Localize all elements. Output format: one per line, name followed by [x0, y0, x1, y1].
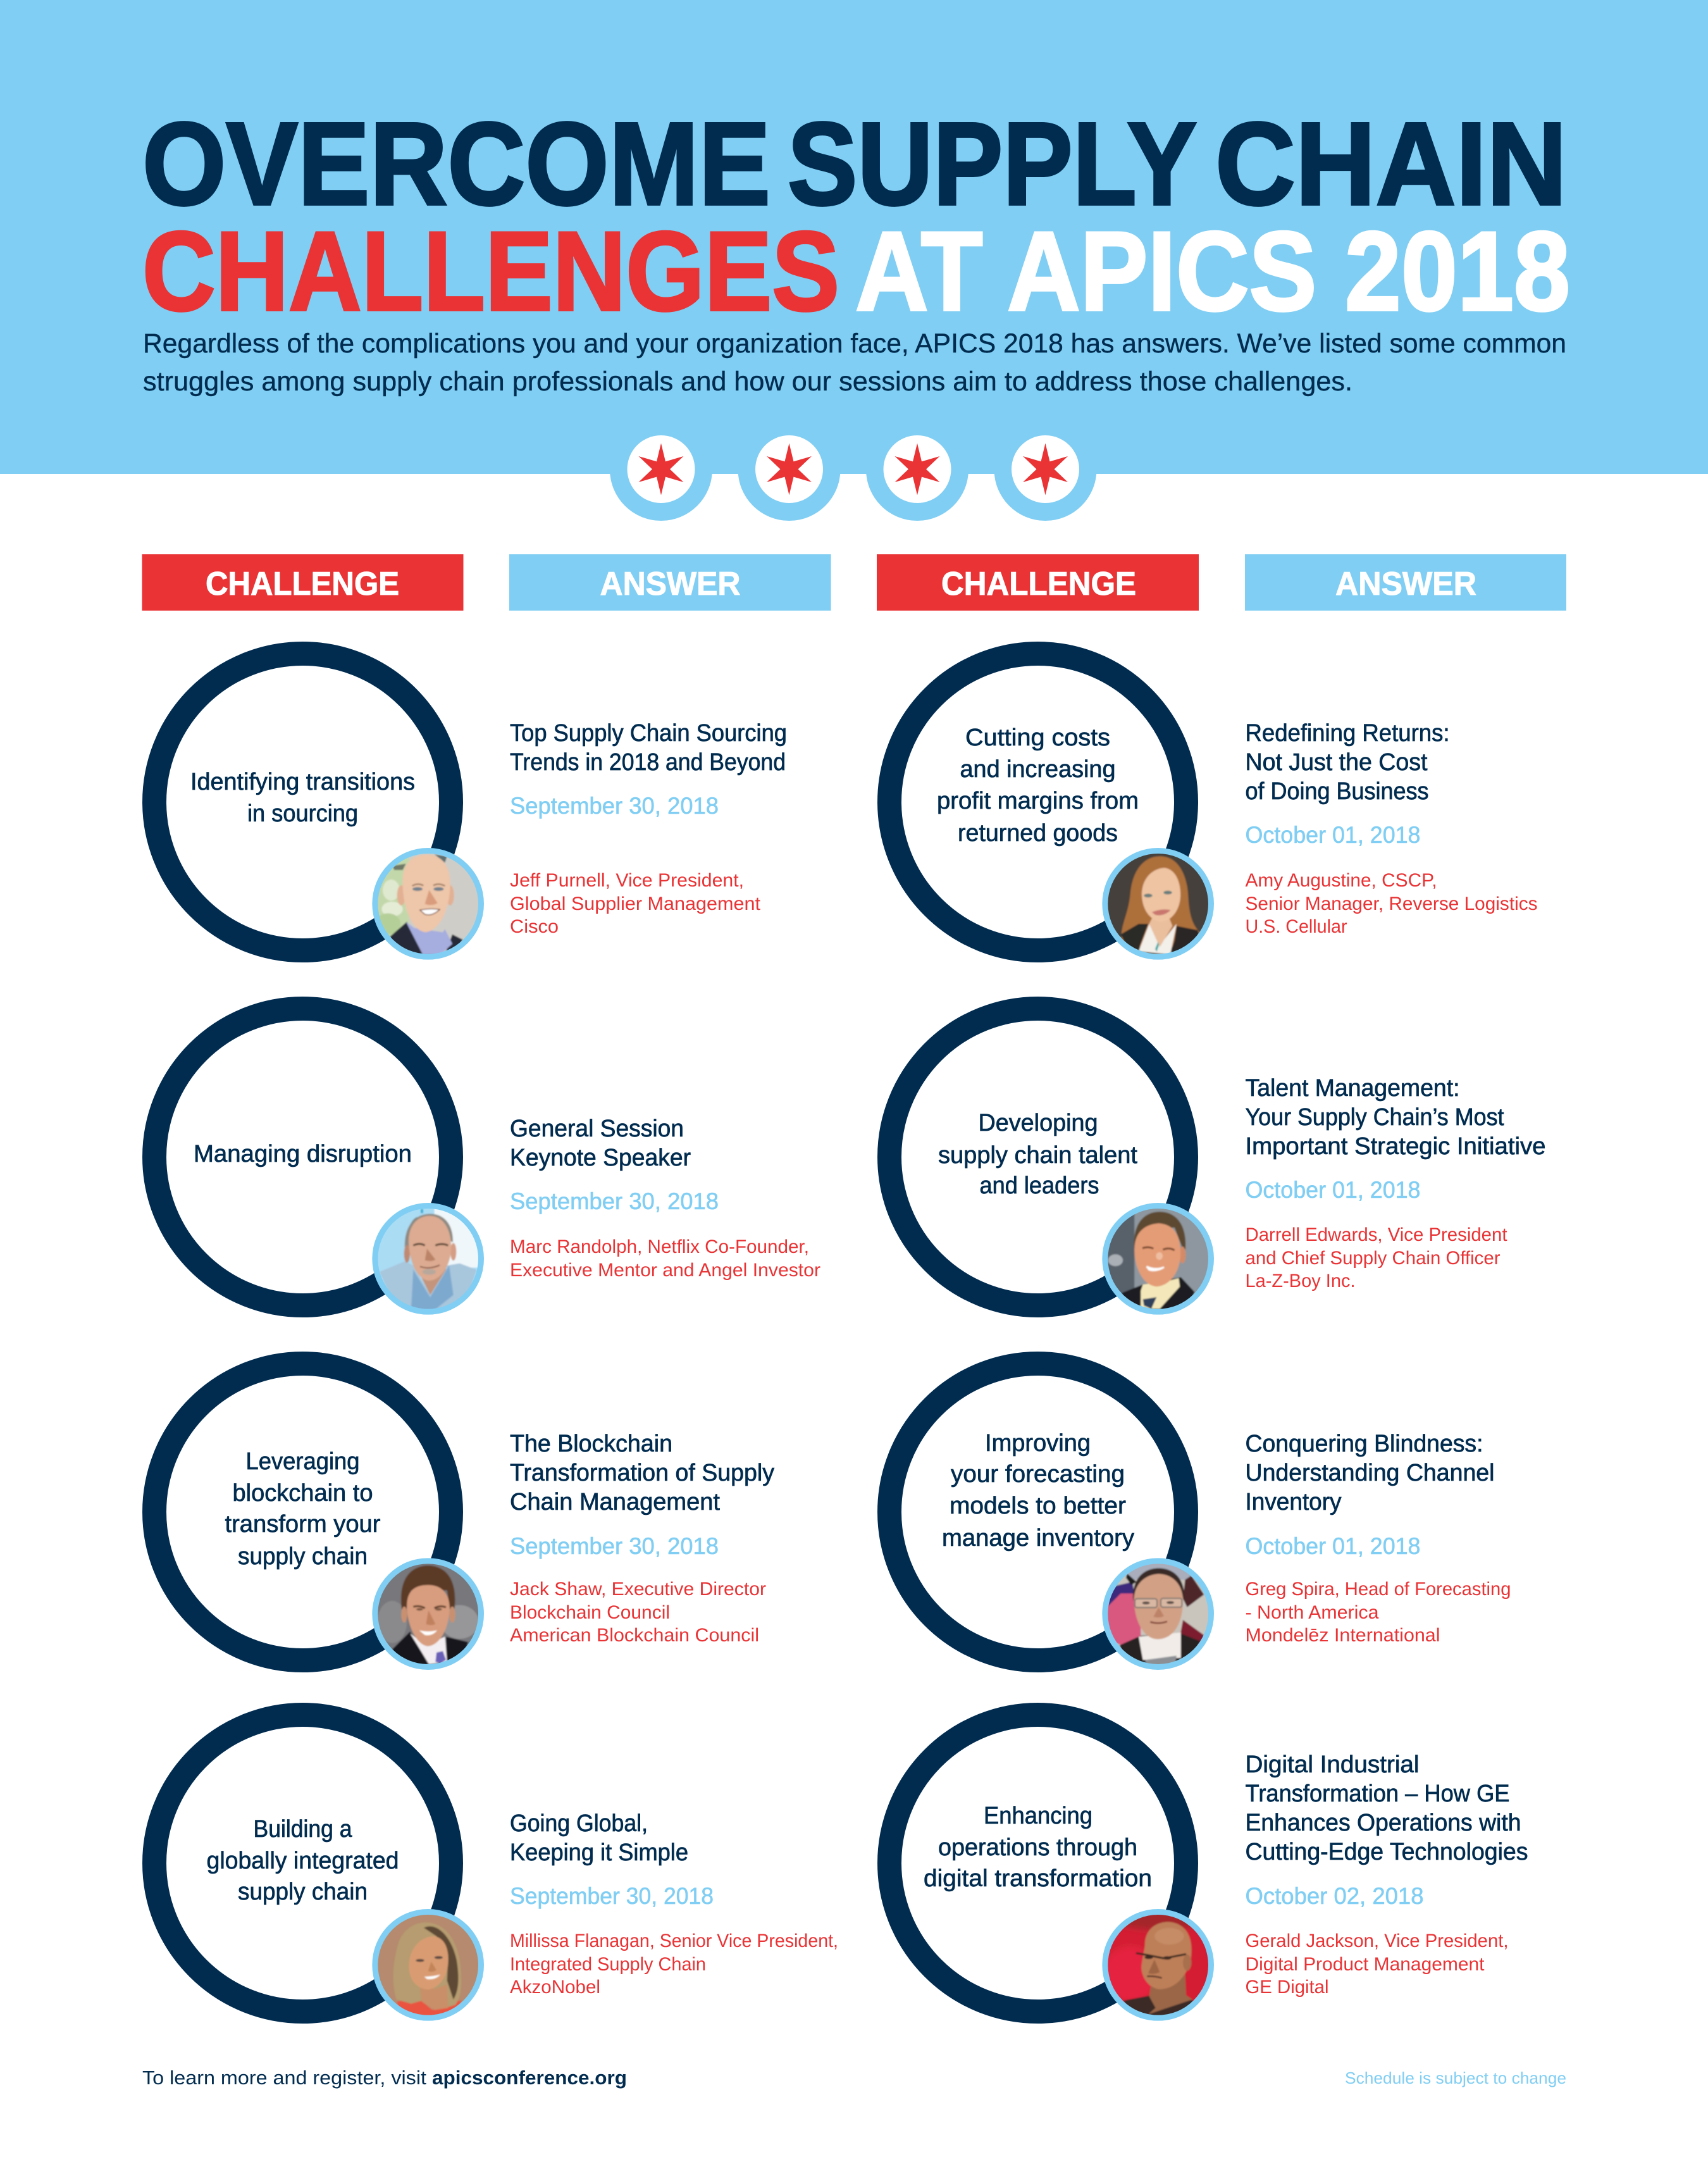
column heading: answer: ANSWER	[600, 566, 740, 602]
answer: Going Global	[510, 1810, 838, 1998]
answer: Top Supply Chain Sourcing: September 30, 2018	[510, 793, 719, 819]
challenge circle: identifying transitions: in sourcing	[247, 800, 358, 827]
answer: Conquering Blindness: Inventory	[1245, 1489, 1341, 1515]
answer: Talent Management	[1245, 1075, 1546, 1291]
answer: Going Global: Keeping it Simple	[510, 1839, 688, 1866]
answer: Conquering Blindness: - North America	[1245, 1602, 1379, 1623]
footer: registration link: To learn more and register, visit	[142, 2067, 426, 2089]
answer: Talent Management: Talent Management:	[1245, 1075, 1460, 1102]
answer: Top Supply Chain Sourcing: Trends in 2018 and Beyond	[510, 749, 786, 776]
portrait: Jeff Purnell	[372, 848, 484, 960]
challenge circle: improving forecasting: Improving	[985, 1430, 1091, 1457]
challenge circle: globally integrated: Building a	[253, 1816, 352, 1843]
answer: Talent Management: Darrell Edwards, Vice President	[1245, 1224, 1507, 1245]
answer: Going Global: Going Global,	[510, 1810, 648, 1837]
title: SUPPLY	[788, 99, 1197, 230]
answer: Redefining Returns: Not Just the Cost	[1245, 749, 1428, 776]
column heading: challenge: CHALLENGE	[206, 566, 399, 602]
challenge circle: developing talent: Developing	[978, 1110, 1098, 1136]
title: AT APICS 2018	[855, 208, 1570, 334]
title: CHALLENGES	[142, 208, 839, 334]
answer: Top Supply Chain Sourcing: Jeff Purnell, Vice President,	[510, 870, 744, 891]
answer: Redefining Returns: Senior Manager, Reverse Logistics	[1245, 893, 1537, 914]
challenge circle: leveraging blockchain: Leveraging	[245, 1448, 359, 1475]
answer: Digital Industrial Transformation: GE Digital	[1245, 1977, 1328, 1998]
answer: General Session Keynote Speaker	[510, 1116, 820, 1281]
answer: Conquering Blindness	[1245, 1431, 1511, 1646]
answer: Top Supply Chain Sourcing: Cisco	[510, 916, 559, 937]
portrait: Amy Augustine	[1102, 848, 1214, 960]
portrait: Marc Randolph	[372, 1203, 484, 1315]
answer: The Blockchain Transformation: Transformation of Supply	[510, 1460, 774, 1486]
answer: The Blockchain Transformation: Chain Management	[510, 1489, 720, 1515]
challenge circle: developing talent	[889, 1009, 1214, 1315]
challenge circle: improving forecasting: your forecasting	[951, 1461, 1125, 1488]
title: OVERCOME	[142, 99, 770, 230]
challenge circle: improving forecasting: manage inventory	[942, 1525, 1134, 1552]
answer: Redefining Returns: October 01, 2018	[1245, 822, 1421, 848]
answer: Digital Industrial Transformation: Cutting-Edge Technologies	[1245, 1839, 1528, 1865]
column heading: answer	[1245, 554, 1566, 611]
challenge circle: returned goods: profit margins from	[937, 788, 1139, 814]
footer: registration link: apicsconference.org	[432, 2067, 627, 2089]
answer: Digital Industrial Transformation	[1245, 1751, 1528, 1998]
answer: The Blockchain Transformation	[510, 1431, 774, 1646]
answer: The Blockchain Transformation: Jack Shaw, Executive Director	[510, 1579, 766, 1600]
answer: Going Global: Integrated Supply Chain	[510, 1954, 706, 1975]
answer: Conquering Blindness: Mondelēz International	[1245, 1625, 1440, 1646]
challenge circle: digital transformation: operations through	[938, 1834, 1137, 1861]
answer: Digital Industrial Transformation: October 02, 2018	[1245, 1883, 1423, 1909]
answer: Redefining Returns	[1245, 720, 1537, 937]
column heading: challenge	[877, 554, 1199, 611]
portrait: Jack Shaw	[372, 1558, 484, 1670]
answer: The Blockchain Transformation: The Blockchain	[510, 1431, 672, 1457]
column heading: challenge: CHALLENGE	[941, 566, 1136, 602]
answer: Digital Industrial Transformation: Transformation – How GE	[1245, 1781, 1509, 1807]
answer: Talent Management: La-Z-Boy Inc.	[1245, 1271, 1355, 1291]
challenge circle: digital transformation: Enhancing	[984, 1803, 1092, 1829]
title	[142, 99, 1570, 334]
answer: Digital Industrial Transformation: Digital Industrial	[1245, 1751, 1420, 1778]
answer: Conquering Blindness: October 01, 2018	[1245, 1533, 1421, 1559]
intro text: Regardless of the complications you and your organization face, APICS 2018 has answers. We’ve listed some common	[143, 328, 1566, 359]
answer: Redefining Returns: U.S. Cellular	[1245, 916, 1347, 937]
challenge circle: leveraging blockchain: blockchain to	[233, 1480, 373, 1507]
challenge circle: managing disruption	[154, 1009, 484, 1315]
answer: The Blockchain Transformation: Blockchain Council	[510, 1602, 670, 1623]
answer: Digital Industrial Transformation: Enhances Operations with	[1245, 1810, 1521, 1836]
column heading: answer	[509, 554, 831, 611]
challenge circle: identifying transitions: Identifying transitions	[190, 769, 415, 795]
answer: Going Global: Millissa Flanagan, Senior Vice President,	[510, 1931, 838, 1951]
column heading: challenge	[142, 554, 463, 611]
challenge circle: digital transformation	[889, 1715, 1215, 2021]
challenge circle: improving forecasting	[889, 1364, 1214, 1670]
challenge circle: globally integrated: globally integrated	[206, 1848, 399, 1874]
intro text	[143, 328, 1566, 397]
answer: General Session Keynote Speaker: September 30, 2018	[510, 1188, 719, 1214]
answer: Going Global: September 30, 2018	[510, 1883, 714, 1909]
answer: Going Global: AkzoNobel	[510, 1977, 600, 1998]
portrait: Millissa Flanagan	[372, 1909, 484, 2021]
challenge circle: leveraging blockchain: transform your	[225, 1511, 381, 1538]
challenge circle: returned goods	[889, 654, 1214, 960]
answer: Top Supply Chain Sourcing	[510, 720, 787, 937]
answer: Digital Industrial Transformation: Gerald Jackson, Vice President,	[1245, 1931, 1508, 1951]
challenge circle: developing talent: and leaders	[979, 1172, 1099, 1199]
footer: schedule note: Schedule is subject to change	[1345, 2068, 1566, 2087]
answer: Conquering Blindness: Conquering Blindness:	[1245, 1431, 1483, 1457]
column heading: answer: ANSWER	[1335, 566, 1476, 602]
header panel	[0, 0, 1708, 474]
challenge circle: leveraging blockchain	[154, 1364, 484, 1670]
intro text: struggles among supply chain professionals and how our sessions aim to address those challenges.	[143, 366, 1352, 397]
answer: General Session Keynote Speaker: Marc Randolph, Netflix Co-Founder,	[510, 1236, 809, 1257]
footer: registration link	[142, 2067, 627, 2089]
answer: Talent Management: Your Supply Chain’s Most	[1245, 1104, 1504, 1131]
challenge circle: leveraging blockchain: supply chain	[238, 1543, 368, 1570]
answer: Top Supply Chain Sourcing: Top Supply Chain Sourcing	[510, 720, 787, 747]
challenge circle: globally integrated	[154, 1715, 484, 2021]
portrait: Gerald Jackson	[1102, 1909, 1214, 2021]
answer: Top Supply Chain Sourcing: Global Supplier Management	[510, 893, 761, 914]
answer: Talent Management: October 01, 2018	[1245, 1177, 1421, 1203]
title: CHAIN	[1215, 99, 1567, 230]
answer: The Blockchain Transformation: September 30, 2018	[510, 1533, 719, 1559]
portrait: Darrell Edwards	[1102, 1203, 1214, 1315]
portrait: Greg Spira	[1102, 1558, 1214, 1670]
icon: four Chicago flag stars	[610, 418, 1097, 521]
answer: General Session Keynote Speaker: Executive Mentor and Angel Investor	[510, 1260, 820, 1281]
challenge circle: developing talent: supply chain talent	[938, 1142, 1137, 1169]
challenge circle: improving forecasting: models to better	[950, 1493, 1126, 1519]
answer: Redefining Returns: of Doing Business	[1245, 778, 1428, 805]
answer: Redefining Returns: Redefining Returns:	[1245, 720, 1450, 747]
answer: Conquering Blindness: Understanding Channel	[1245, 1460, 1494, 1486]
answer: Talent Management: and Chief Supply Chain Officer	[1245, 1248, 1501, 1269]
answer: General Session Keynote Speaker: General Session	[510, 1116, 684, 1142]
answer: General Session Keynote Speaker: Keynote Speaker	[510, 1145, 691, 1171]
challenge circle: returned goods: returned goods	[958, 820, 1118, 847]
challenge circle: digital transformation: digital transformation	[924, 1865, 1152, 1892]
challenge circle: managing disruption: Managing disruption	[194, 1141, 412, 1167]
answer: Conquering Blindness: Greg Spira, Head of Forecasting	[1245, 1579, 1511, 1600]
challenge circle: globally integrated: supply chain	[238, 1879, 368, 1905]
answer: Redefining Returns: Amy Augustine, CSCP,	[1245, 870, 1437, 891]
answer: Digital Industrial Transformation: Digital Product Management	[1245, 1954, 1485, 1975]
challenge circle: returned goods: Cutting costs	[965, 725, 1110, 751]
answer: The Blockchain Transformation: American Blockchain Council	[510, 1625, 759, 1646]
challenge circle: identifying transitions	[154, 654, 484, 960]
challenge circle: returned goods: and increasing	[960, 756, 1116, 783]
answer: Talent Management: Important Strategic Initiative	[1245, 1133, 1546, 1160]
